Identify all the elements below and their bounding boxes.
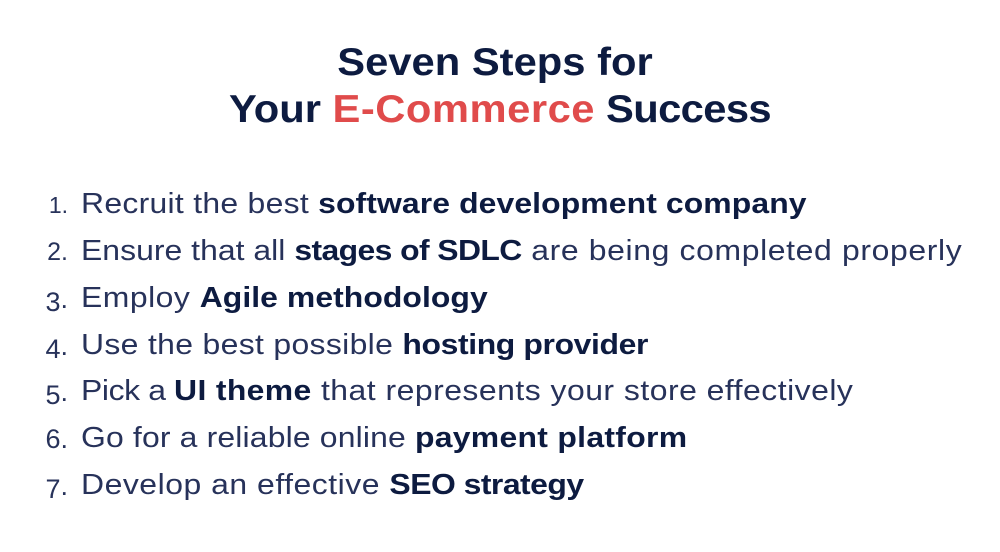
step 7: 7. — [45, 471, 68, 504]
step 4: Use the best possible hosting provider — [81, 329, 648, 361]
numbered list — [45, 188, 962, 504]
title: Seven Steps for — [337, 41, 653, 84]
step 6: 6. — [45, 424, 68, 454]
title: Your E-Commerce Success — [229, 88, 771, 130]
step 2: 2. — [47, 238, 68, 266]
step 4: 4. — [45, 331, 68, 364]
step 6: Go for a reliable online payment platform — [81, 422, 687, 454]
step 7: Develop an effective SEO strategy — [81, 469, 584, 501]
step 5: Pick a UI theme that represents your store effectively — [81, 375, 853, 407]
title — [229, 41, 771, 130]
step 1: 1. — [49, 192, 68, 218]
step 5: 5. — [45, 377, 68, 410]
step 2: Ensure that all stages of SDLC are being completed properly — [81, 235, 962, 267]
step 1: Recruit the best software development company — [81, 188, 807, 220]
step 3: 3. — [45, 284, 68, 317]
step 3: Employ Agile methodology — [81, 282, 488, 314]
